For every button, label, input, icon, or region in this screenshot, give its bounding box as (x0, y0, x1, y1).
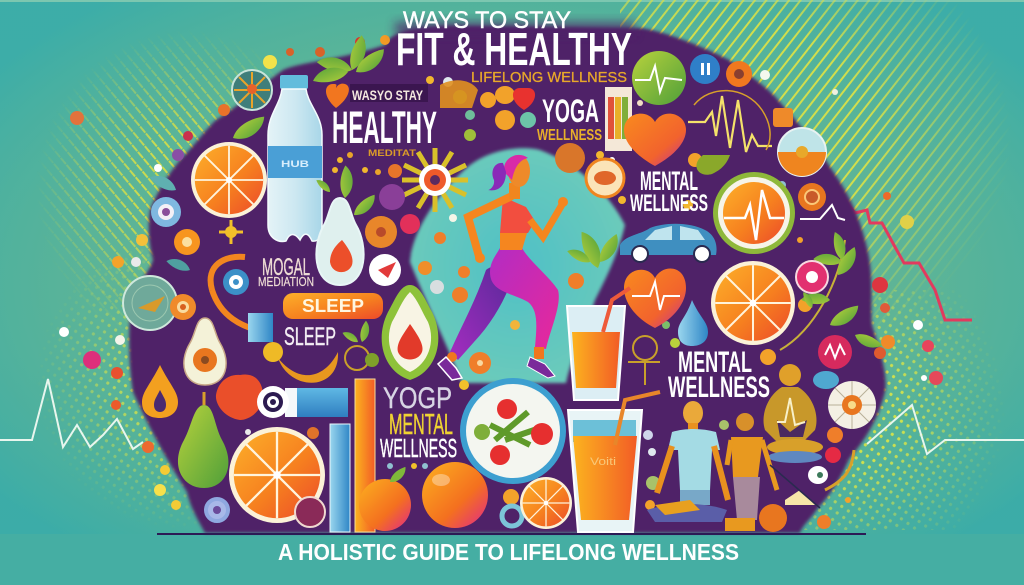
avocado small (184, 318, 226, 385)
sleep button (283, 293, 383, 319)
yoga mat roll (257, 386, 348, 418)
sleep button: SLEEP (302, 296, 364, 316)
ankh icon (628, 336, 660, 385)
swirl icon (211, 257, 270, 333)
wellness white label: WELLNESS (380, 433, 457, 463)
mogal label: MOGAL (262, 254, 310, 281)
purple collage backdrop (129, 26, 886, 533)
centre cyan hole (410, 148, 625, 383)
runner hole confetti and plant (418, 214, 625, 374)
red zigzag line (835, 187, 972, 320)
healthy label: HEALTHY (332, 102, 437, 153)
plate with salad (460, 378, 566, 484)
yellow apple (422, 462, 488, 528)
tall orange bar (355, 379, 375, 532)
branch with leaves (780, 232, 882, 354)
collage heart and ways label (326, 84, 428, 108)
white ecg (800, 205, 845, 220)
daisy flower (828, 381, 876, 429)
banana and leaves (263, 321, 379, 383)
meditating figure (764, 364, 823, 463)
ecg line left (0, 379, 143, 449)
ecg line right (867, 405, 1024, 454)
mental label: MENTAL (640, 166, 698, 196)
ring icon (170, 294, 196, 320)
blue pill (813, 371, 839, 389)
green round food (696, 155, 730, 175)
leaves and fruit mid left (316, 165, 420, 286)
collage fruit top band (440, 80, 535, 110)
yoga mat floor (647, 500, 787, 532)
sun flower icon (402, 148, 468, 212)
runner (438, 155, 568, 380)
car (620, 224, 717, 262)
small orange slice (520, 477, 572, 529)
sleep label: SLEEP (284, 323, 336, 351)
pink circle lower (818, 335, 852, 369)
right lower icons (770, 450, 854, 508)
wellness label: WELLNESS (630, 190, 708, 217)
top green leaves (313, 35, 389, 84)
title: WAYS TO STAY (403, 7, 571, 34)
mental label lower: MENTAL (678, 346, 752, 379)
ecg orange circle (713, 172, 795, 254)
meditat label: MEDITAT (368, 148, 417, 158)
bar chart icon (605, 87, 632, 151)
orange slice top left (191, 142, 267, 218)
wellness label lower: WELLNESS (668, 371, 770, 404)
title: LIFELONG WELLNESS (471, 69, 627, 86)
water bottle: HUB (281, 159, 310, 169)
title: FIT & HEALTHY (396, 23, 632, 75)
mediation label: MEDIATION (258, 274, 314, 289)
pink circle top (796, 261, 828, 293)
bottom baseline (157, 533, 866, 535)
glass two: Voiti (590, 456, 616, 468)
confetti on collage (59, 35, 943, 529)
left small icons (150, 169, 243, 277)
blue circle icon (690, 54, 720, 84)
small orange round food (555, 143, 585, 173)
avocado top (316, 198, 364, 285)
glass one (567, 288, 630, 400)
title (396, 7, 632, 86)
round badge icon (586, 159, 624, 197)
orange slice right (711, 261, 795, 345)
golden ecg trace (688, 91, 772, 152)
orange circle icon (726, 61, 752, 87)
compass icon top left (232, 70, 272, 110)
small plum circle (295, 497, 325, 527)
mental gold label: MENTAL (389, 409, 453, 441)
red fruit (216, 374, 263, 420)
orange ring icon (798, 183, 826, 211)
large avocado (382, 285, 438, 380)
orange drop icon (142, 365, 178, 418)
yoga label: YOGA (542, 93, 599, 129)
second heart (624, 269, 686, 328)
water drop (678, 300, 708, 346)
green ecg circle (632, 51, 686, 105)
clock circle left (123, 276, 177, 330)
yogp label: YOGP (383, 382, 452, 415)
big orange bottom left (229, 427, 325, 523)
gauge circle (778, 128, 826, 176)
water bottle (268, 75, 322, 241)
title haze (395, 22, 635, 36)
pear (178, 392, 228, 488)
blue bar (330, 424, 350, 532)
collage heart and ways label: WASYO STAY (352, 87, 424, 103)
wellness gold label: WELLNESS (537, 127, 602, 144)
standing woman (727, 413, 777, 520)
glass two (568, 392, 660, 532)
orange square icon (773, 108, 793, 127)
red apple (359, 467, 411, 531)
orange heart (624, 114, 686, 166)
footer tagline: A HOLISTIC GUIDE TO LIFELONG WELLNESS (278, 539, 739, 565)
leaf over orange (230, 116, 268, 141)
standing man (657, 401, 728, 505)
blue block (248, 313, 273, 342)
